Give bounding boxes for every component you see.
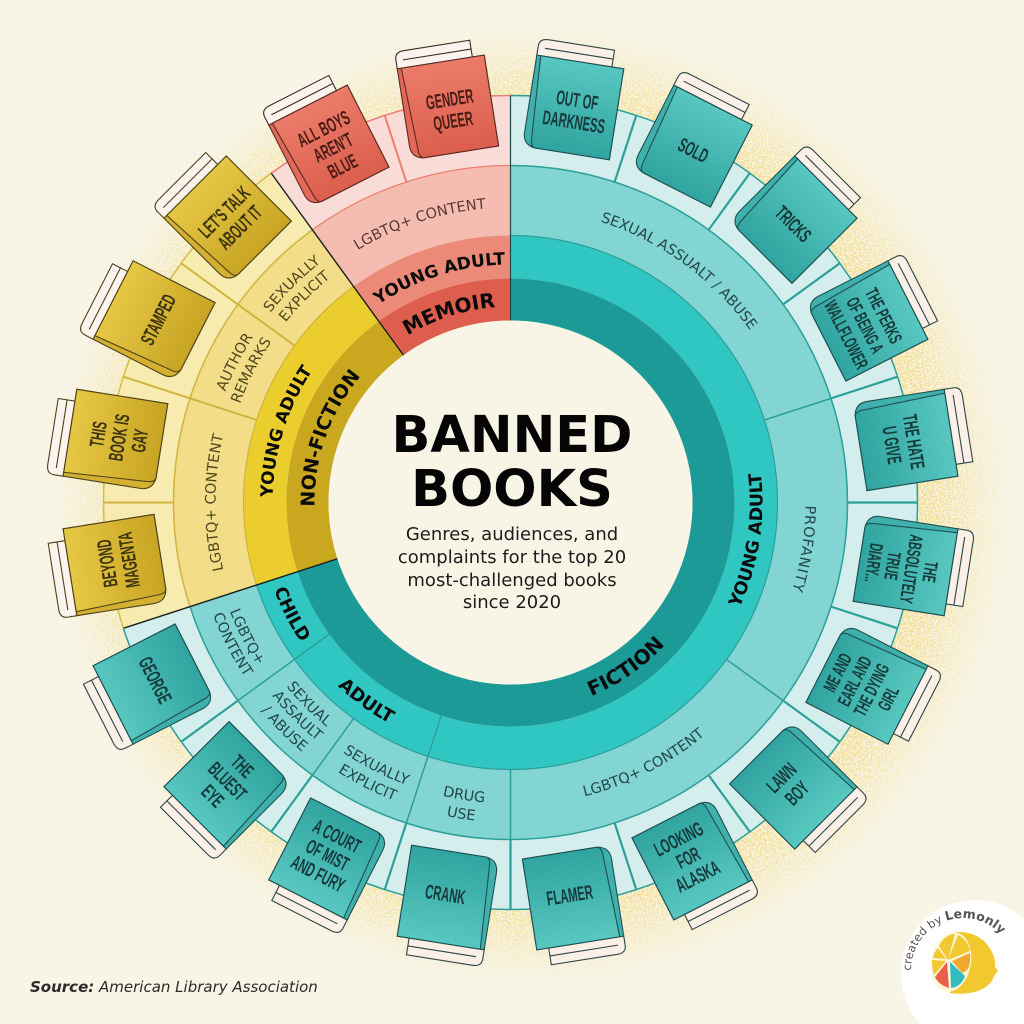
book: George — [78, 624, 215, 752]
book: The Bluest Eye: THE — [226, 751, 258, 783]
book: Beyond Magenta — [46, 514, 168, 618]
icon: lemon — [926, 929, 998, 995]
book: This Book Is Gay: THIS — [86, 420, 112, 449]
book: Crank: CRANK — [424, 881, 467, 909]
complaint labels: SEXUALLY — [264, 254, 318, 312]
audience labels: YOUNG ADULT — [260, 364, 310, 497]
complaint labels — [163, 148, 861, 865]
panel: teal fiction sectors — [104, 96, 918, 910]
book: Out of Darkness — [522, 38, 626, 160]
book: Flamer: FLAMER — [545, 881, 595, 911]
book: Sold — [632, 70, 760, 207]
book: The Absolutely True Diary: TRUE — [879, 550, 904, 581]
book: Gender Queer: GENDER — [424, 85, 475, 115]
book: Me and Earl and the Dying Girl: ME AND — [820, 650, 857, 696]
book: All Boys Aren't Blue: ALL BOYS — [294, 107, 354, 152]
book: Beyond Magenta: MAGENTA — [114, 530, 145, 589]
book: Stamped: STAMPED — [137, 291, 181, 349]
book: This Book Is Gay — [46, 387, 168, 491]
book: The Perks of Being a Wallflower: THE PERKS — [860, 285, 906, 347]
book: This Book Is Gay: BOOK IS — [105, 412, 134, 463]
book: Looking for Alaska — [632, 798, 760, 935]
complaint labels: / ABUSE — [260, 706, 308, 752]
book: The Perks of Being a Wallflower: WALLFLOWER — [819, 297, 872, 373]
subtitle: most-challenged books — [407, 570, 617, 591]
complaint labels: ASSAULT — [272, 692, 324, 738]
book: A Court of Mist and Fury: A COURT — [309, 816, 364, 858]
audience labels: CHILD — [276, 588, 309, 640]
book: Lawn Boy: BOY — [781, 777, 814, 810]
complaint labels: EXPLICIT — [278, 269, 328, 322]
badge: created by Lemonly — [901, 900, 1024, 1024]
book: Lawn Boy: LAWN — [762, 759, 801, 798]
book: Crank — [395, 845, 499, 967]
book: Tricks: TRICKS — [770, 202, 815, 247]
book: This Book Is Gay: GAY — [128, 428, 153, 454]
complaint labels: SEXUAL ASSUALT / ABUSE — [601, 212, 758, 330]
book: The Perks of Being a Wallflower: OF BEING A — [841, 294, 887, 357]
center circle — [328, 320, 692, 684]
book: The Perks of Being a Wallflower — [806, 253, 943, 381]
genre labels — [251, 256, 664, 696]
book: Lawn Boy — [730, 722, 869, 861]
book: Tricks — [730, 144, 869, 283]
complaint labels: LGBTQ+ CONTENT — [583, 726, 702, 796]
book: All Boys Aren't Blue: AREN'T — [310, 129, 357, 167]
book: The Absolutely True Diary: DIARY... — [860, 542, 886, 584]
book: The Bluest Eye: BLUEST — [203, 758, 251, 805]
book: A Court of Mist and Fury — [261, 798, 389, 935]
book: Me and Earl and the Dying Girl: THE DYING — [850, 660, 894, 720]
title — [392, 406, 632, 519]
complaint labels: SEXUALLY — [344, 745, 410, 784]
subtitle: Genres, audiences, and — [406, 524, 618, 545]
book: The Hate U Give: THE HATE — [898, 413, 928, 471]
book: All Boys Aren't Blue: BLUE — [324, 150, 362, 184]
complaint labels: REMARKS — [230, 337, 270, 403]
book: Looking for Alaska: LOOKING — [651, 818, 707, 861]
book: Stamped — [78, 253, 215, 381]
complaint labels: SEXUAL — [287, 682, 330, 727]
subtitle: complaints for the top 20 — [398, 547, 626, 568]
complaint labels: PROFANITY — [793, 506, 816, 594]
audience labels — [208, 200, 814, 722]
audience labels: YOUNG ADULT — [728, 474, 763, 604]
book: The Bluest Eye: EYE — [196, 781, 228, 812]
complaint labels: LGBTQ+ CONTENT — [353, 198, 486, 250]
genre labels: MEMOIR — [402, 293, 496, 334]
book: A Court of Mist and Fury: OF MIST — [302, 835, 353, 876]
complaint labels: AUTHOR — [217, 334, 253, 392]
complaint labels: LGBTQ+ CONTENT — [204, 432, 223, 571]
genre labels: NON-FICTION — [300, 368, 360, 505]
audience labels: YOUNG ADULT — [372, 252, 505, 302]
book: Flamer — [522, 845, 626, 967]
book: Sold: SOLD — [674, 134, 712, 168]
book: The Hate U Give — [853, 387, 975, 491]
book: Me and Earl and the Dying Girl: EARL AND — [834, 653, 877, 710]
genre labels: FICTION — [587, 636, 664, 696]
book: Me and Earl and the Dying Girl — [806, 624, 943, 752]
book: Let's Talk About It: ABOUT IT — [214, 201, 267, 255]
book: The Bluest Eye — [152, 722, 291, 861]
book: Let's Talk About It: LET'S TALK — [194, 182, 255, 243]
book: The Absolutely True Diary: ABSOLUTELY — [895, 533, 926, 605]
book: Gender Queer — [395, 38, 499, 160]
book: The Hate U Give: U GIVE — [877, 425, 905, 466]
badge text: created by Lemonly — [904, 910, 1006, 970]
complaint labels: DRUG — [444, 786, 484, 802]
audience labels: ADULT — [338, 680, 396, 722]
source note: Source: American Library Association — [30, 978, 318, 996]
book: Out of Darkness: OUT OF — [555, 87, 600, 115]
book: Let's Talk About It — [152, 144, 291, 283]
complaint labels: CONTENT — [214, 613, 254, 674]
complaint labels: EXPLICIT — [339, 764, 398, 800]
complaint labels: LGBTQ+ — [230, 608, 262, 662]
book: The Absolutely True Diary: THE — [917, 560, 941, 584]
book: Out of Darkness: DARKNESS — [541, 107, 607, 138]
book: George: GEORGE — [134, 654, 176, 707]
book: The Absolutely True Diary — [853, 514, 975, 618]
subtitle — [398, 524, 626, 613]
book: All Boys Aren't Blue — [261, 70, 389, 207]
book: Looking for Alaska: FOR — [673, 843, 704, 874]
title: BOOKS — [411, 460, 613, 519]
title: BANNED — [392, 406, 632, 465]
book: Gender Queer: QUEER — [432, 107, 475, 136]
book: Beyond Magenta: BEYOND — [93, 538, 123, 589]
book: Me and Earl and the Dying Girl: GIRL — [874, 683, 904, 715]
subtitle: since 2020 — [463, 592, 561, 613]
book: A Court of Mist and Fury: AND FURY — [287, 851, 348, 897]
complaint labels: USE — [448, 806, 475, 820]
book: Looking for Alaska: ALASKA — [672, 856, 724, 898]
